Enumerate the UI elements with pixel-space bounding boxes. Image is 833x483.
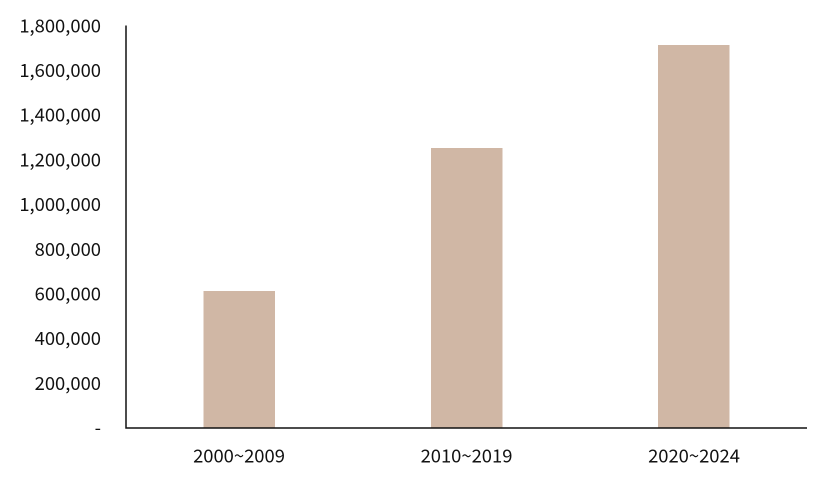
y-axis labels: 400,000	[35, 325, 101, 351]
axes	[126, 26, 807, 428]
y-axis labels: 1,400,000	[19, 102, 101, 128]
y-axis labels: 600,000	[35, 280, 101, 306]
bars	[204, 45, 730, 428]
x-axis labels	[193, 442, 740, 468]
y-axis labels: 800,000	[35, 236, 101, 262]
y-axis labels: 1,000,000	[19, 191, 101, 217]
x-axis labels: 2020~2024	[648, 442, 740, 468]
x-axis labels: 2000~2009	[193, 442, 285, 468]
y-axis labels: 200,000	[35, 370, 101, 396]
y-axis labels: 1,800,000	[19, 12, 101, 38]
x-axis labels: 2010~2019	[421, 442, 512, 468]
y-axis labels: -	[95, 415, 101, 441]
y-axis labels	[19, 12, 101, 441]
bar: 2010~2019	[431, 148, 502, 428]
y-axis labels: 1,200,000	[19, 146, 101, 172]
bar: 2020~2024	[658, 45, 730, 428]
y-axis labels: 1,600,000	[19, 57, 101, 83]
bar: 2000~2009	[204, 291, 275, 428]
